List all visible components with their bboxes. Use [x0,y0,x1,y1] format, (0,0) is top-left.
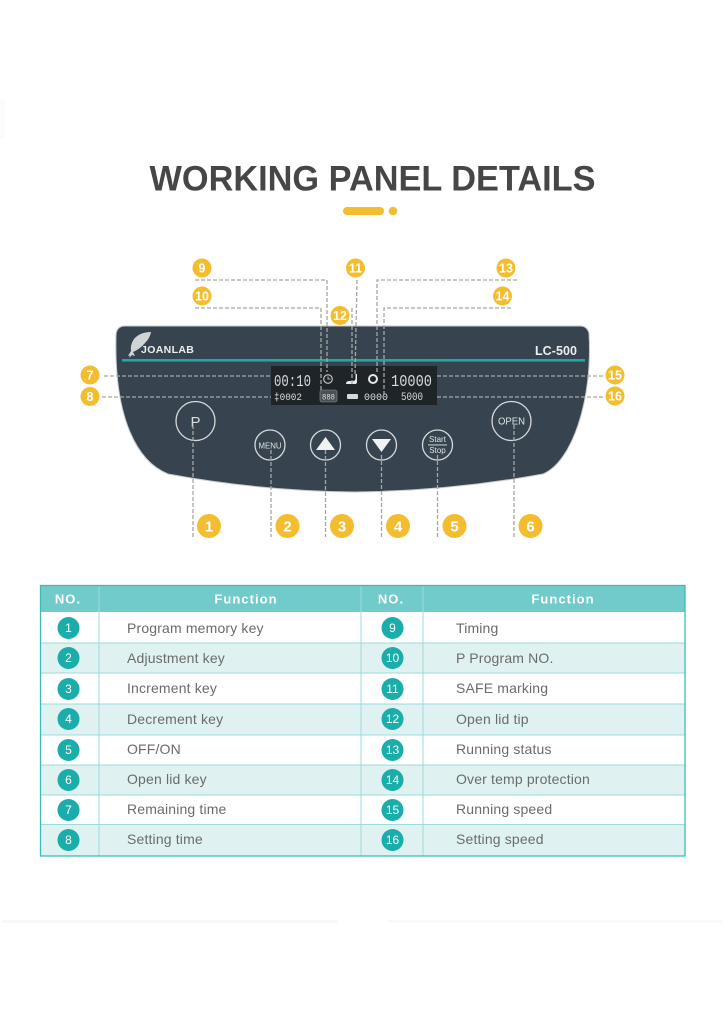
title accent [343,207,397,215]
callout badges: 1 [205,518,213,536]
table rows: left [58,617,264,851]
table rows: right: Running status [456,741,552,757]
table rows: left: Increment key [127,680,217,696]
table rows: left: 4 [65,712,72,726]
logo: JOANLAB: JOANLAB [141,344,194,356]
callout badges: 7 [87,368,94,382]
table rows: left: 1 [65,621,72,635]
table rows: left: Setting time [127,831,203,847]
table rows: right: 13 [386,743,399,757]
table rows: right: Running speed [456,801,552,817]
button: OPEN: OPEN [498,416,525,428]
table rows: left: Remaining time [127,801,227,817]
callout badges: 10 [195,290,209,304]
table header: NO. [55,592,81,606]
LCD display: 00:10 [274,373,311,392]
callout badges: 12 [333,309,347,323]
table rows: right [382,617,590,851]
table rows: right: P Program NO. [456,650,554,666]
callout badges: 8 [87,390,94,404]
table rows: left: Decrement key [127,711,223,727]
table rows: right: 9 [389,621,396,635]
model label: LC-500 [535,344,577,358]
table rows: right: Over temp protection [456,771,590,787]
table rows: right: Timing [456,620,498,636]
table rows: right: 16 [386,833,399,847]
callout badges: 2 [283,518,292,536]
LCD display: 10000 [391,373,432,392]
button: start/stop: Start [429,435,447,444]
table rows: left: 2 [65,651,72,665]
callout badges: 11 [349,262,362,276]
table rows: left: 7 [65,803,72,817]
table rows: left: Open lid key [127,771,207,787]
table header: Function [531,592,595,606]
button: P [176,402,215,440]
LCD display: 0000 [364,392,388,404]
table rows: right: 15 [386,803,399,817]
button: start/stop: Stop [429,446,446,455]
callout badges: 13 [499,262,513,276]
button: MENU [255,430,285,460]
panel: control panel [116,326,589,492]
table rows: right: 12 [386,712,399,726]
button: start/stop [422,430,452,460]
callout badges: 14 [496,290,509,304]
table rows: right: SAFE marking [456,680,548,696]
table rows: left: Adjustment key [127,650,225,666]
LCD display: ‡0002 [274,392,302,404]
callout badges: 3 [338,518,346,536]
callout badges: 6 [526,518,535,536]
table rows: right: Open lid tip [456,711,529,727]
button: up [310,430,340,460]
table header: Function [214,592,278,606]
table header [40,585,685,612]
button: MENU: MENU [258,440,282,450]
callout badges: 16 [608,390,622,404]
table rows: left: 5 [65,743,72,757]
callout badges: 15 [608,368,622,382]
table rows: right: 14 [386,773,399,787]
table rows: left: 6 [65,773,72,787]
callout badges [80,258,624,538]
logo: JOANLAB [128,332,194,358]
title: WORKING PANEL DETAILS [150,160,596,198]
function table [40,585,685,856]
table rows: right: Setting speed [456,831,544,847]
table rows: right: 10 [386,651,399,665]
button: down [366,430,396,460]
table rows: right: 11 [386,682,399,696]
callout leader lines [102,280,603,537]
table rows: left: OFF/ON [127,741,181,757]
callout badges: 4 [394,518,403,536]
callout badges: 5 [450,518,459,536]
callout badges: 9 [199,262,206,276]
table rows: left: 3 [65,682,72,696]
LCD display [271,366,437,405]
teal divider [122,359,585,362]
LCD display: 888 [322,394,335,402]
button: OPEN [492,402,531,440]
table rows: left: 8 [65,833,72,847]
table header: NO. [378,592,404,606]
table rows: left: Program memory key [127,620,264,636]
button: P: P [190,414,201,431]
LCD display: 5000 [401,392,423,404]
